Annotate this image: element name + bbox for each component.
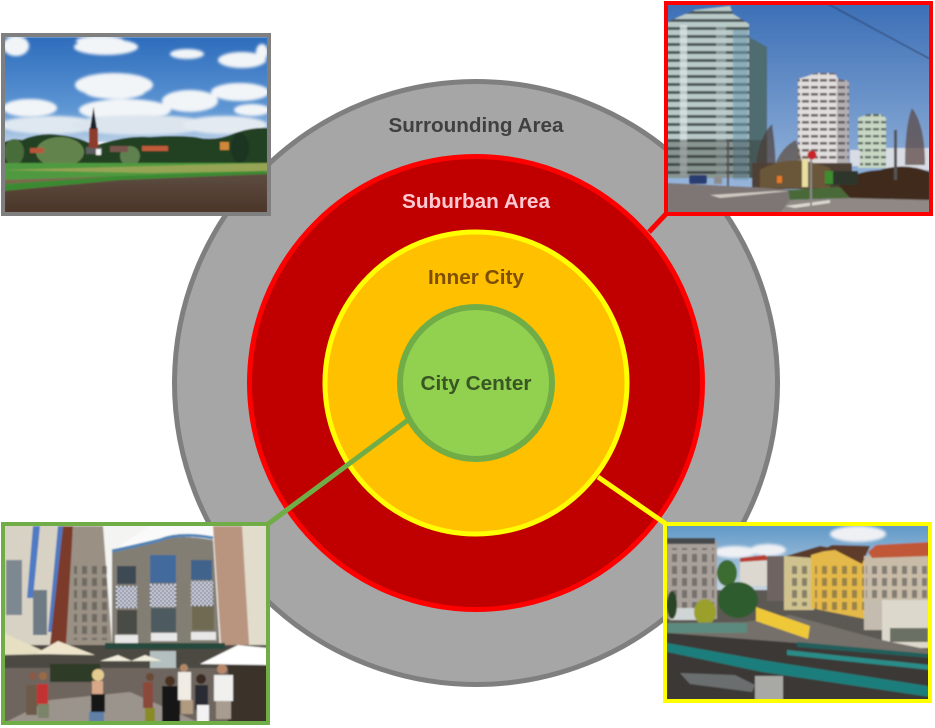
photo: inner city street with elevated railway xyxy=(665,524,930,701)
photo frame: yellow xyxy=(665,524,930,701)
photo frame: red xyxy=(666,3,931,214)
middle tower xyxy=(798,73,849,168)
yellow building xyxy=(811,548,870,620)
concentric city zones diagram xyxy=(174,82,778,684)
far tower xyxy=(858,114,886,168)
zone: inner city xyxy=(325,232,627,534)
tall tower xyxy=(749,37,767,178)
street and fence xyxy=(667,615,930,655)
connector: city center to photo xyxy=(268,420,408,524)
label: Inner City: Inner City xyxy=(428,267,525,289)
cream building xyxy=(784,556,814,610)
viaduct tracks xyxy=(667,633,930,701)
central facade xyxy=(112,537,220,650)
right corner building xyxy=(864,556,930,600)
label: Surrounding Area: Surrounding Area xyxy=(388,115,564,137)
plaza and crowd xyxy=(5,667,230,721)
parked car xyxy=(689,175,707,184)
fields xyxy=(5,162,264,192)
connector: suburban area to photo xyxy=(649,214,666,232)
left buildings xyxy=(5,526,64,646)
road and verge xyxy=(667,183,795,213)
stop sign xyxy=(810,150,812,208)
photo frame: green xyxy=(3,524,268,723)
zone: city center xyxy=(400,307,552,459)
connector: inner city to photo xyxy=(598,477,666,524)
trees xyxy=(717,560,737,586)
trees and shrubs xyxy=(756,124,776,164)
mid buildings xyxy=(740,558,768,586)
kiosk and orange sign xyxy=(802,159,808,187)
umbrellas xyxy=(5,634,42,656)
zone: suburban area xyxy=(250,156,702,610)
label: City Center: City Center xyxy=(420,373,532,395)
trees xyxy=(4,128,268,168)
zone: surrounding area xyxy=(174,82,778,684)
church spire xyxy=(89,128,98,148)
storefronts xyxy=(4,645,268,670)
photo: surrounding area village and field xyxy=(0,35,270,214)
right buildings xyxy=(212,526,250,646)
photo frame: gray xyxy=(3,35,269,214)
left building xyxy=(667,541,717,619)
photo: city center courtyard xyxy=(3,524,268,723)
photo: suburban area tower blocks xyxy=(666,3,931,214)
label: Suburban Area: Suburban Area xyxy=(402,191,551,213)
